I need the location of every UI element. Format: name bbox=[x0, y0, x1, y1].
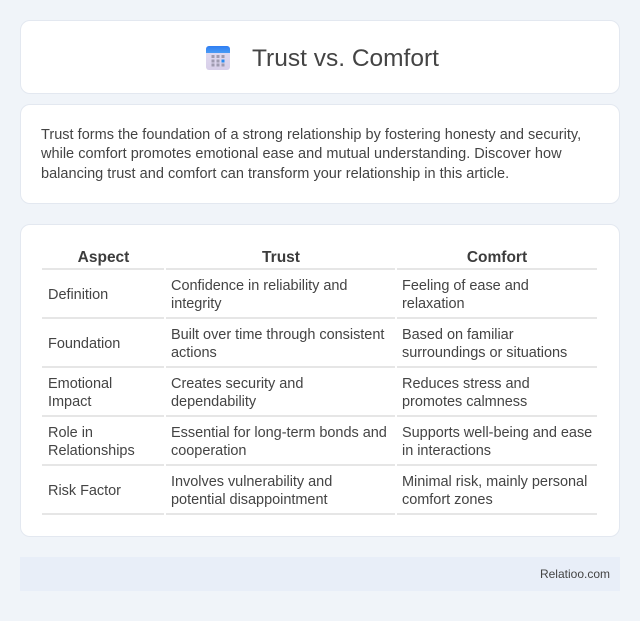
row: Emotional Impact bbox=[48, 376, 530, 410]
row: Role in Relationships bbox=[48, 425, 592, 459]
text block: introduction bbox=[41, 127, 581, 182]
title: Trust vs. Comfort bbox=[252, 45, 439, 72]
row: Foundation: Foundation bbox=[48, 336, 120, 352]
row: Emotional Impact: Impact bbox=[48, 394, 91, 410]
footer bar bbox=[20, 557, 620, 591]
row: Definition: integrity bbox=[171, 296, 222, 312]
row: Definition: relaxation bbox=[402, 296, 465, 312]
text block: introduction: while comfort promotes emotional ease and mutual understanding. Discover how bbox=[41, 146, 562, 162]
row: Role in Relationships: Supports well-being and ease bbox=[402, 425, 592, 441]
row: Definition: Definition bbox=[48, 287, 108, 303]
table header bbox=[78, 249, 527, 266]
row: Emotional Impact: dependability bbox=[171, 394, 256, 410]
row: Role in Relationships: cooperation bbox=[171, 443, 246, 459]
row: Risk Factor: Minimal risk, mainly personal bbox=[402, 474, 587, 490]
row: Role in Relationships: Essential for long-term bonds and bbox=[171, 425, 387, 441]
row: Risk Factor bbox=[48, 474, 587, 508]
panel: title card bbox=[20, 20, 620, 94]
row: Definition: Feeling of ease and bbox=[402, 278, 529, 294]
row: Role in Relationships: Role in bbox=[48, 425, 93, 441]
row: Risk Factor: Risk Factor bbox=[48, 483, 121, 499]
row: Role in Relationships: in interactions bbox=[402, 443, 491, 459]
row: Foundation: actions bbox=[171, 345, 217, 361]
row: Emotional Impact: Reduces stress and bbox=[402, 376, 530, 392]
icon: calendar bbox=[206, 46, 230, 70]
row: Role in Relationships: Relationships bbox=[48, 443, 135, 459]
row: Foundation: surroundings or situations bbox=[402, 345, 567, 361]
table header: Aspect bbox=[78, 249, 129, 266]
row: Definition: Confidence in reliability and bbox=[171, 278, 347, 294]
row: Risk Factor: potential disappointment bbox=[171, 492, 327, 508]
row: Emotional Impact: promotes calmness bbox=[402, 394, 527, 410]
row: Emotional Impact: Creates security and bbox=[171, 376, 303, 392]
table header: Trust bbox=[262, 249, 300, 266]
text block: introduction: Trust forms the foundation of a strong relationship by fostering honesty and security, bbox=[41, 127, 581, 143]
row: Emotional Impact: Emotional bbox=[48, 376, 112, 392]
text block: introduction: balancing trust and comfort can transform your relationship in this article. bbox=[41, 166, 509, 182]
table header: Comfort bbox=[467, 249, 527, 266]
panel: comparison table bbox=[20, 224, 620, 537]
footer text: Relatioo.com bbox=[540, 567, 610, 581]
row: Definition bbox=[48, 278, 529, 312]
row: Foundation: Built over time through consistent bbox=[171, 327, 384, 343]
panel: introduction bbox=[20, 104, 620, 204]
row: Risk Factor: Involves vulnerability and bbox=[171, 474, 332, 490]
row: Foundation bbox=[48, 327, 567, 361]
row: Foundation: Based on familiar bbox=[402, 327, 514, 343]
row: Risk Factor: comfort zones bbox=[402, 492, 493, 508]
